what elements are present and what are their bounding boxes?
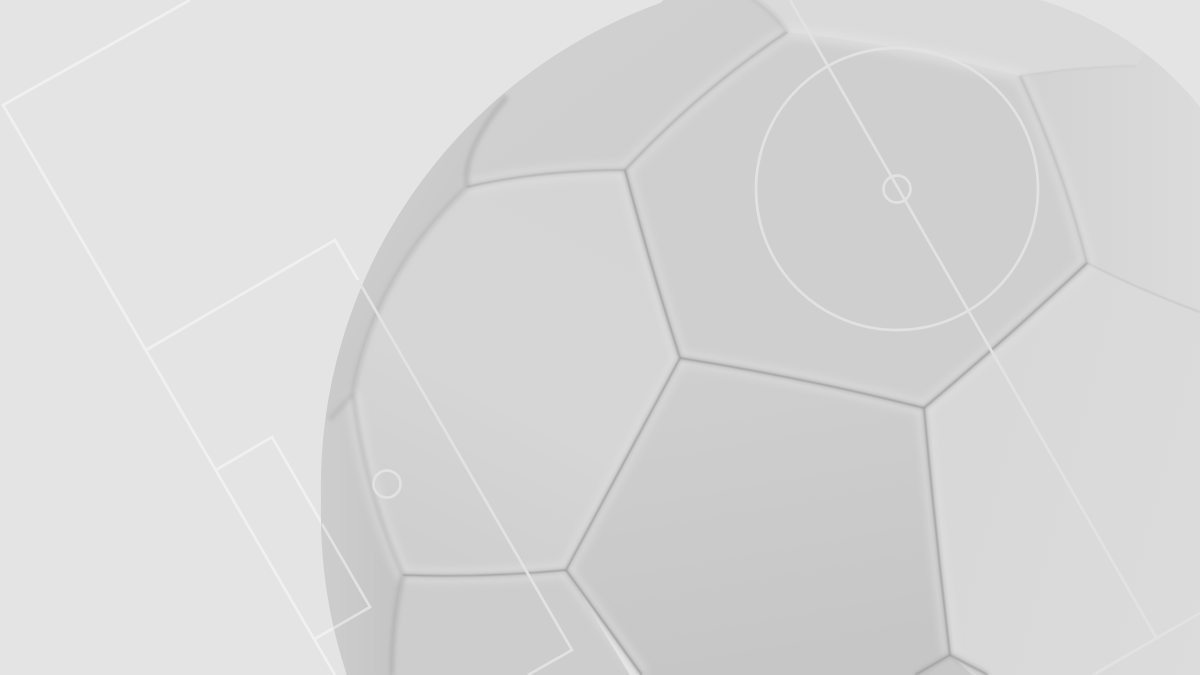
panel: left hexagon	[353, 170, 680, 576]
panel: right	[924, 263, 1200, 675]
panel: upper right	[1023, 52, 1200, 310]
panel: bottom small	[930, 656, 972, 675]
panel: bottom left	[392, 570, 645, 675]
goal box overlay	[322, 524, 370, 628]
penalty box overlay	[358, 280, 572, 675]
panel: lower left	[321, 394, 402, 675]
soccer ball	[250, 0, 1200, 675]
center spot	[884, 176, 910, 202]
ball panels	[250, 0, 1200, 675]
pitch lines over ball	[322, 0, 1200, 675]
panel seams	[403, 32, 1200, 675]
panel: top	[759, 0, 1144, 74]
halfway line	[790, 0, 1157, 639]
panel: bottom pentagon	[566, 358, 950, 675]
panel: top hexagon	[625, 32, 1087, 408]
panel: top left	[450, 0, 787, 187]
pitch lines outside ball	[3, 0, 572, 675]
penalty spot	[374, 470, 400, 498]
center circle	[756, 48, 1038, 330]
soft seam shadow	[330, 0, 1087, 675]
panel: left sliver	[325, 93, 507, 420]
touch line	[1093, 613, 1200, 675]
light band along seams	[353, 32, 1087, 675]
